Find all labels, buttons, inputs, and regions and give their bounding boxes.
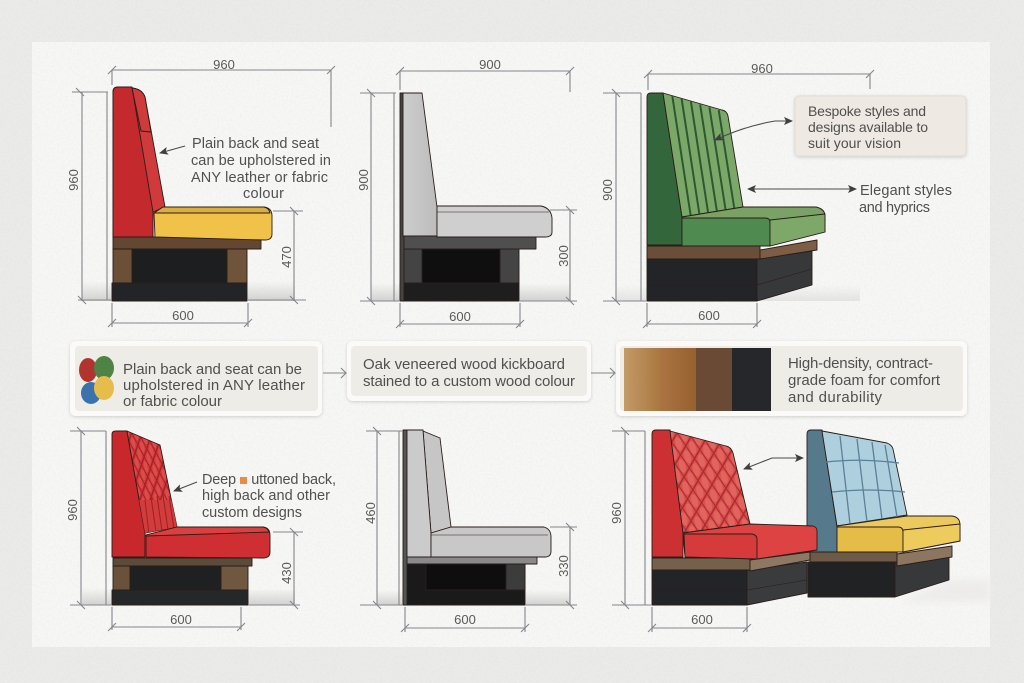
dimension labels: 900	[600, 179, 615, 201]
card: kickboard: stained to a custom wood colour	[363, 373, 575, 390]
back	[403, 430, 451, 605]
seat	[431, 527, 551, 557]
wood rail	[113, 237, 261, 249]
dimension labels: 900	[356, 169, 371, 191]
dimension labels: 600	[449, 309, 471, 324]
blue back side	[807, 430, 837, 552]
text: elegant styles	[859, 183, 952, 216]
blue unit rail	[810, 546, 952, 566]
dimension labels	[66, 57, 294, 323]
dimension labels: 300	[556, 245, 571, 267]
feature strip	[70, 341, 967, 416]
sofa 2: grey sketch	[356, 57, 577, 328]
arrow	[591, 368, 615, 378]
arrow: bespoke	[715, 121, 792, 140]
arrow	[323, 368, 346, 378]
card: upholstery colours	[70, 341, 322, 416]
blue unit base	[808, 557, 949, 597]
seat	[146, 527, 270, 558]
callout text: Deep uttoned back,	[202, 472, 336, 488]
wood swatches	[624, 348, 771, 411]
dimension labels: 460	[363, 502, 378, 524]
rail	[647, 240, 817, 259]
dimension labels	[356, 57, 571, 324]
dimensions	[72, 66, 335, 327]
channel tufted back	[663, 93, 743, 217]
double arrow	[744, 458, 803, 469]
card: kickboard: Oak veneered wood kickboard	[363, 356, 565, 373]
card text: grade foam for comfort	[788, 372, 941, 389]
callout box: bespoke: designs available to	[808, 119, 928, 135]
sofa 4: red deep buttoned	[65, 427, 336, 631]
callout text: ANY leather or fabric	[191, 170, 328, 186]
card text: High-density, contract-	[788, 355, 933, 372]
dimension labels: 900	[479, 57, 501, 72]
callout text	[191, 136, 331, 202]
card text: and durability	[788, 389, 882, 406]
dimensions	[360, 67, 577, 328]
callout text: colour	[243, 186, 284, 202]
dimension labels: 600	[691, 612, 713, 627]
kickboard base	[112, 249, 247, 301]
dimension labels: 960	[65, 499, 80, 521]
callout box: bespoke	[795, 96, 966, 156]
callout box: bespoke: suit your vision	[808, 135, 901, 151]
blue tufted back	[822, 431, 907, 526]
tufted back	[127, 431, 180, 540]
card text: Plain back and seat can be	[123, 361, 302, 378]
floor shadow	[371, 283, 570, 301]
sofa 1: red back, yellow seat	[66, 57, 335, 327]
floor shadow	[377, 590, 570, 605]
dimension labels: 960	[66, 169, 81, 191]
seat cushion	[154, 207, 272, 240]
card text: upholstered in ANY leather	[123, 377, 305, 394]
callout text: Plain back and seat	[192, 136, 319, 152]
dimension labels: 330	[556, 555, 571, 577]
dimension labels: 960	[213, 57, 235, 72]
red tufted back	[670, 431, 750, 533]
arrow	[174, 482, 197, 491]
orange marker	[240, 477, 247, 484]
sofa 5: grey sketch	[360, 427, 577, 632]
dimension labels: 600	[454, 612, 476, 627]
arrow	[160, 146, 185, 153]
seat	[437, 206, 552, 237]
dimension labels: 600	[170, 612, 192, 627]
callout text: high back and other	[202, 488, 330, 504]
back side	[112, 431, 145, 557]
dimensions	[70, 427, 303, 631]
card: kickboard	[347, 341, 591, 401]
card text	[123, 361, 305, 410]
callout text: custom designs	[202, 505, 302, 521]
dimension labels	[363, 502, 571, 627]
dimension labels: 430	[279, 562, 294, 584]
base	[400, 249, 519, 301]
rail	[407, 557, 537, 564]
text: elegant styles: and hyprics	[859, 200, 930, 216]
text: elegant styles: Elegant styles	[860, 183, 952, 199]
red seat	[683, 524, 817, 559]
card text	[788, 355, 941, 406]
floor shadow	[616, 285, 860, 301]
red back side	[652, 430, 683, 557]
base	[407, 564, 525, 605]
icon: colour swatches	[79, 356, 114, 404]
dimension labels	[600, 61, 773, 323]
dimension labels: 960	[751, 61, 773, 76]
callout text	[202, 472, 336, 521]
sofa 6: red and blue pair	[609, 427, 990, 632]
yellow seat	[837, 516, 960, 552]
dimension labels: 600	[698, 308, 720, 323]
floor shadow	[900, 580, 990, 602]
upholstered back	[113, 87, 165, 237]
floor shadow	[82, 588, 295, 605]
callout box: bespoke: Bespoke styles and	[808, 103, 926, 119]
base	[647, 251, 812, 301]
sofa 3: green channel back	[600, 61, 966, 328]
rail	[403, 236, 536, 249]
dimension labels	[609, 502, 713, 627]
card: foam and wood samples	[616, 341, 967, 416]
dimensions	[603, 70, 874, 328]
dimensions	[612, 427, 751, 632]
seat cushion	[682, 207, 825, 246]
dimension labels	[65, 499, 294, 627]
red unit rail	[652, 552, 810, 571]
arrow: elegant	[748, 188, 856, 190]
dimension labels: 600	[172, 308, 194, 323]
rail	[113, 558, 252, 566]
base	[112, 566, 248, 605]
back side panel	[647, 93, 682, 245]
dimension labels: 960	[609, 502, 624, 524]
dimension labels: 470	[279, 246, 294, 268]
back	[400, 93, 437, 301]
floor shadow	[82, 281, 295, 301]
red unit base	[652, 562, 807, 605]
dimensions	[360, 427, 577, 632]
card text: or fabric colour	[123, 393, 222, 410]
callout text: can be upholstered in	[191, 153, 331, 169]
